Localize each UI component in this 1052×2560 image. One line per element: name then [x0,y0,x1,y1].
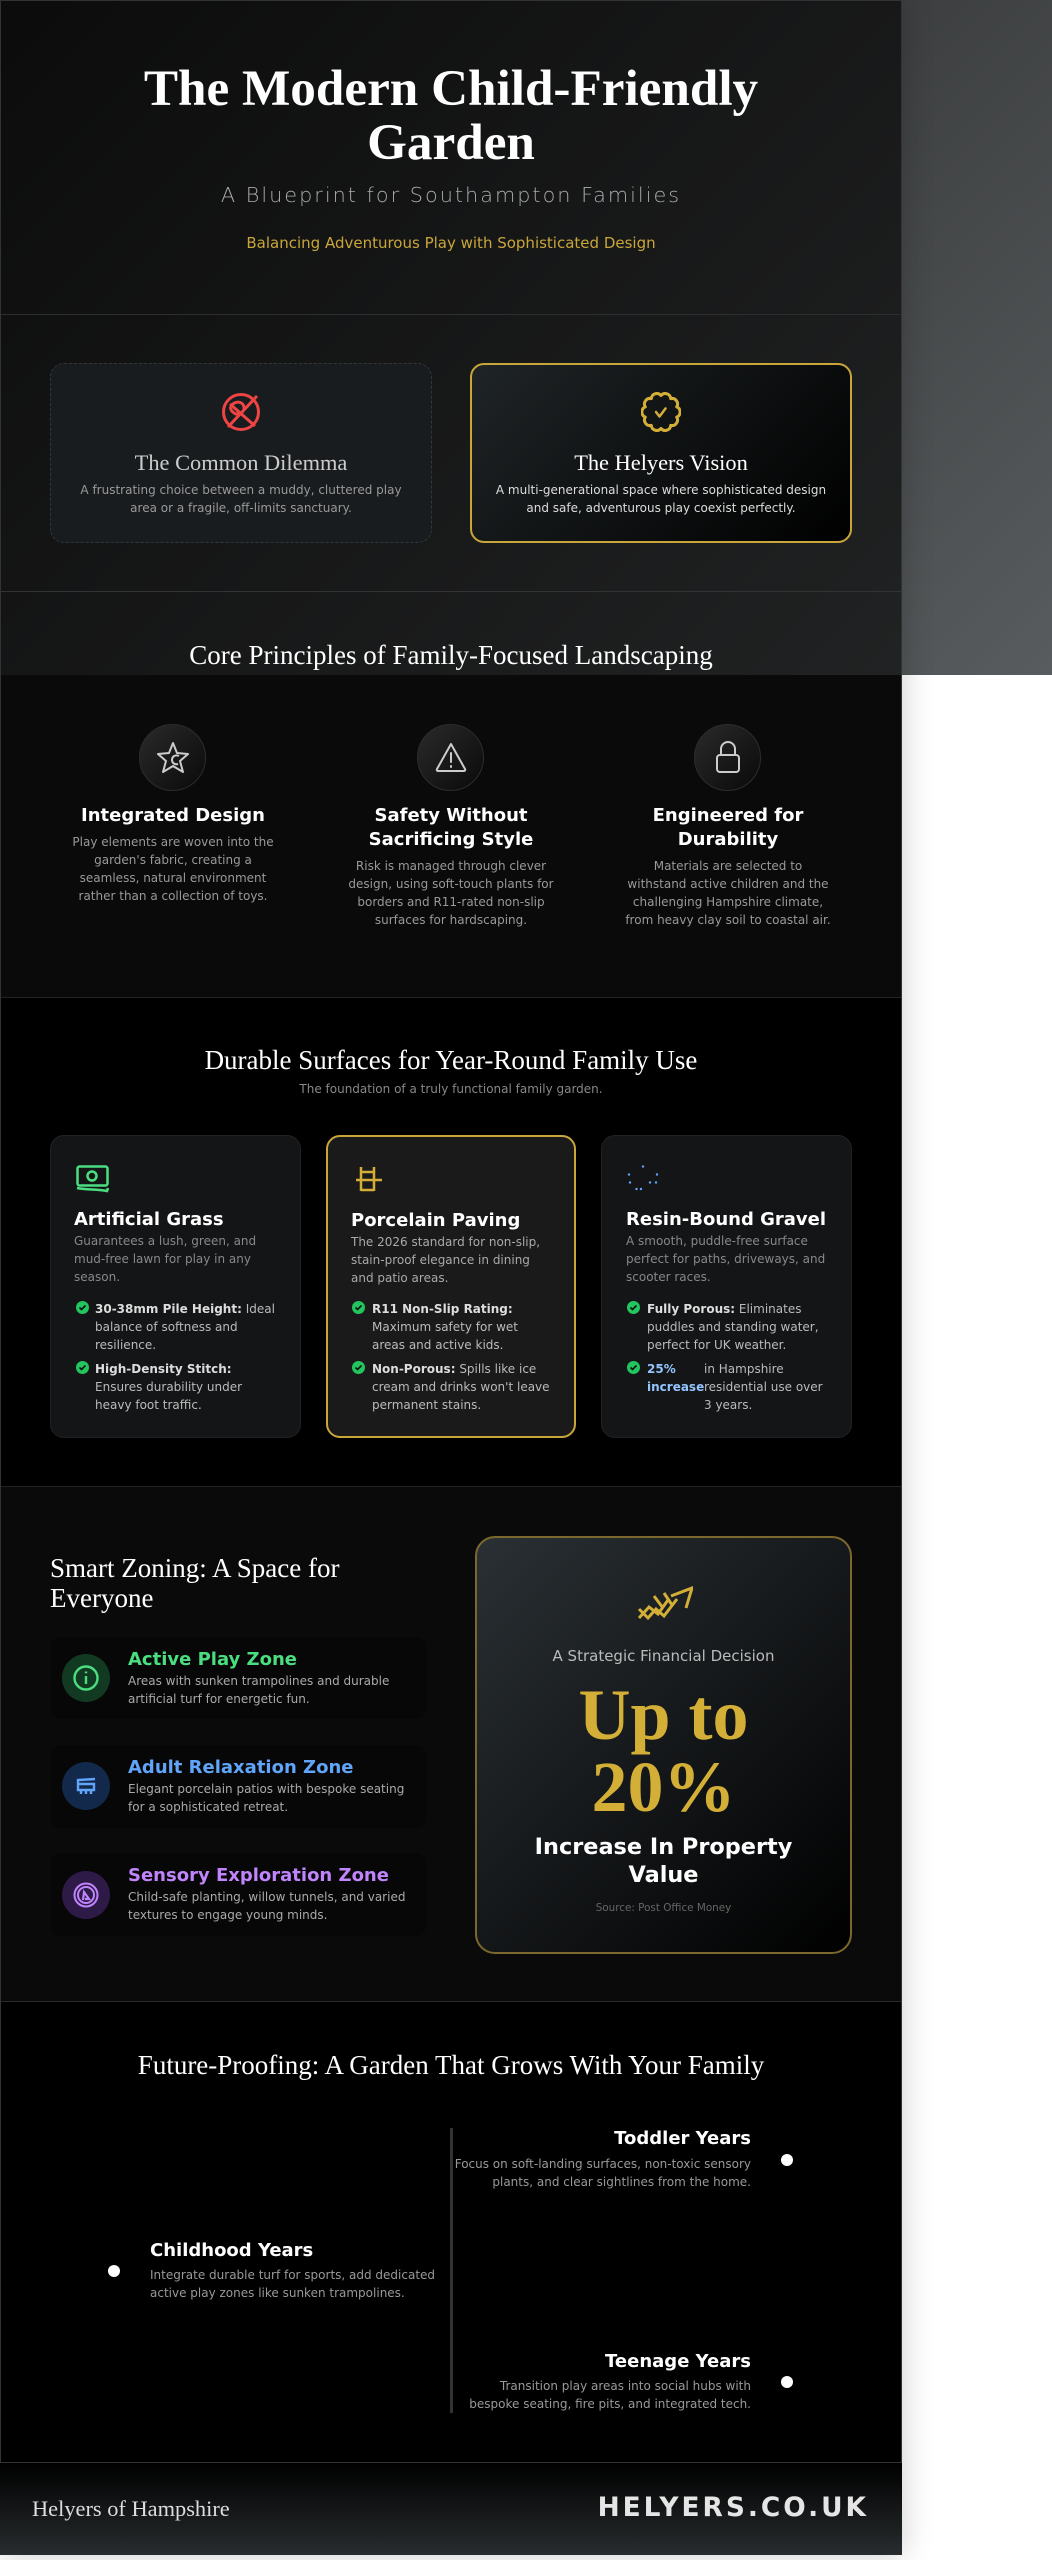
description: Focus on soft-landing surfaces, non-toxic sensory [455,2157,751,2171]
lower section: future-proofing background [0,2001,902,2462]
icon: gravel dots [628,1165,658,1190]
heading: Childhood Years [150,2240,313,2261]
feature text: in Hampshire [704,1362,784,1376]
description: from heavy clay soil to coastal air. [625,913,831,927]
description: bespoke seating, fire pits, and integrated tech. [469,2397,751,2411]
feature text: balance of softness and [95,1320,238,1334]
icon: warning triangle [417,724,484,791]
feature text: residential use over [704,1380,823,1394]
description: A frustrating choice between a muddy, cluttered play [80,483,402,497]
stat caption: Value [628,1862,698,1888]
big stat [578,1675,748,1827]
heading: Sensory Exploration Zone [128,1865,389,1886]
website: HELYERS.CO.UK [598,2492,869,2523]
description: perfect for paths, driveways, and [626,1252,825,1266]
header [144,60,758,252]
description [455,2155,751,2191]
check item [76,1361,89,1374]
description: A multi-generational space where sophisticated design [496,483,826,497]
marker [108,2265,120,2277]
big stat: 20% [592,1747,736,1827]
heading: smart zoning: Everyone [50,1583,153,1613]
icon: hash tiles [356,1167,382,1192]
feature text [647,1302,819,1352]
description: season. [74,1270,120,1284]
description: A smooth, puddle-free surface [626,1234,808,1248]
heading [653,805,804,850]
title: Garden [367,114,535,171]
description: Elegant porcelain patios with bespoke seating [128,1782,404,1796]
heading: smart zoning: Smart Zoning: A Space for [50,1553,339,1583]
description: withstand active children and the [627,877,829,891]
description [348,859,554,927]
heading: durable surfaces: Durable Surfaces for Year-Round Family Use [205,1045,697,1075]
icon: star [139,724,206,791]
brand name: Helyers of Hampshire [32,2496,230,2521]
label: A Strategic Financial Decision [553,1647,774,1665]
heading: The Common Dilemma [135,450,347,475]
panel: safety without sacrificing style [348,724,554,927]
description: area or a fragile, off-limits sanctuary. [130,501,352,515]
description: garden's fabric, creating a [94,853,252,867]
panel: financial callout [475,1536,852,1954]
page gradient backdrop [0,0,1052,675]
description: design, using soft-touch plants for [348,877,554,891]
description [469,2377,751,2413]
heading: Porcelain Paving [351,1210,520,1231]
heading: Engineered for [653,805,803,826]
description [128,1890,405,1922]
panel: the helyers vision [470,363,852,543]
title [144,60,758,171]
feature text: puddles and standing water, [647,1320,819,1334]
heading: Resin-Bound Gravel [626,1209,826,1230]
title: The Modern Child-Friendly [144,60,758,117]
stat caption [535,1834,792,1888]
check item [352,1301,365,1314]
feature text: perfect for UK weather. [647,1338,786,1352]
description: artificial turf for energetic fun. [128,1692,310,1706]
lower section: surfaces background [0,997,902,1486]
timeline item: childhood years [108,2239,448,2305]
feature text: Maximum safety for wet [372,1320,518,1334]
icon: trending arrows [638,1586,693,1620]
heading: Durability [678,829,778,850]
description [350,1235,540,1285]
description: Child-safe planting, willow tunnels, and varied [128,1890,405,1904]
heading: Safety Without [374,805,527,826]
description: textures to engage young minds. [128,1908,327,1922]
description: and safe, adventurous play coexist perfectly. [526,501,796,515]
feature stat [647,1362,704,1394]
description: stain-proof elegance in dining [351,1253,530,1267]
timeline line [450,2128,453,2413]
feature text: 3 years. [704,1398,752,1412]
feature text [95,1302,275,1352]
icon: crossed-out play [222,393,260,431]
heading: Adult Relaxation Zone [128,1757,353,1778]
feature stat: increase [647,1380,704,1394]
panel: resin-bound gravel [601,1135,852,1438]
subheading: The foundation of a truly functional family garden. [299,1082,603,1096]
panel: engineered for durability [625,724,831,927]
check item [627,1361,640,1374]
description: The 2026 standard for non-slip, [351,1235,540,1249]
panel: artificial grass [50,1135,301,1438]
feature text: Fully Porous: Eliminates [647,1302,801,1316]
description: for a sophisticated retreat. [128,1800,288,1814]
panel: integrated design [72,724,274,903]
feature text: High-Density Stitch: [95,1362,232,1376]
panel: porcelain paving [326,1135,576,1438]
description: surfaces for hardscaping. [375,913,527,927]
description [496,483,826,515]
icon: padlock [694,724,761,791]
description: Materials are selected to [654,859,802,873]
description: Play elements are woven into the [72,835,274,849]
heading: Integrated Design [81,805,265,826]
description [74,1234,256,1284]
feature text [372,1302,518,1352]
heading: Artificial Grass [74,1209,224,1230]
description [80,483,402,515]
description [626,1234,825,1284]
footer [0,2462,902,2555]
description: Risk is managed through clever [356,859,546,873]
description: borders and R11-rated non-slip [357,895,545,909]
marker [781,2376,793,2388]
description: Transition play areas into social hubs with [500,2379,751,2393]
feature text [372,1362,550,1412]
check item [76,1301,89,1314]
heading: Active Play Zone [128,1649,297,1670]
panel: adult relaxation zone [50,1745,426,1828]
description: Areas with sunken trampolines and durable [128,1674,389,1688]
description [128,1782,404,1814]
description: seamless, natural environment [80,871,266,885]
heading: Teenage Years [605,2351,751,2372]
feature text: Non-Porous: Spills like ice [372,1362,536,1376]
lower section: zoning background [0,1486,902,2001]
source: Source: Post Office Money [596,1902,731,1914]
marker [781,2154,793,2166]
feature text: Ensures durability under [95,1380,242,1394]
heading: core principles: Core Principles of Family-Focused Landscaping [189,640,713,670]
feature text: permanent stains. [372,1398,481,1412]
icon: sensory rings [62,1871,110,1919]
feature text [95,1362,242,1412]
description [625,859,831,927]
panel: active play zone [50,1637,426,1719]
panel: sensory exploration zone [50,1853,426,1936]
icon: info [62,1654,110,1702]
stat caption: Increase In Property [535,1834,792,1860]
feature text: heavy foot traffic. [95,1398,202,1412]
description: and patio areas. [351,1271,448,1285]
description: rather than a collection of toys. [79,889,267,903]
feature text: resilience. [95,1338,156,1352]
description: Guarantees a lush, green, and [74,1234,256,1248]
description: scooter races. [626,1270,711,1284]
description: challenging Hampshire climate, [633,895,823,909]
feature text: R11 Non-Slip Rating: [372,1302,513,1316]
icon: seating [62,1762,110,1810]
check item [627,1301,640,1314]
feature text [704,1362,823,1412]
timeline item: toddler years [455,2127,795,2193]
description: active play zones like sunken trampolines. [150,2286,405,2300]
heading: The Helyers Vision [574,450,748,475]
lower section: principles background [0,675,902,997]
check item [352,1361,365,1374]
heading [369,805,533,850]
heading: smart zoning [50,1553,340,1613]
top section tint [0,0,902,675]
heading: future-proofing: Future-Proofing: A Garden That Grows With Your Family [138,2050,764,2080]
big stat: Up to [578,1675,748,1755]
subtitle: A Blueprint for Southampton Families [221,183,681,207]
feature text: areas and active kids. [372,1338,503,1352]
description [150,2266,435,2302]
heading: Sacrificing Style [369,829,533,850]
description [128,1674,389,1706]
description: mud-free lawn for play in any [74,1252,251,1266]
tagline: Balancing Adventurous Play with Sophisticated Design [246,234,656,252]
description [72,835,274,903]
panel: the common dilemma [50,363,432,543]
feature stat: 25% [647,1362,676,1376]
feature text: cream and drinks won't leave [372,1380,550,1394]
icon: turf [76,1165,109,1192]
description: plants, and clear sightlines from the home. [492,2175,751,2189]
description: Integrate durable turf for sports, add dedicated [150,2268,435,2282]
timeline item: teenage years [455,2350,795,2416]
icon: gold badge check [641,392,681,432]
feature text: 30-38mm Pile Height: Ideal [95,1302,275,1316]
heading: Toddler Years [614,2128,751,2149]
